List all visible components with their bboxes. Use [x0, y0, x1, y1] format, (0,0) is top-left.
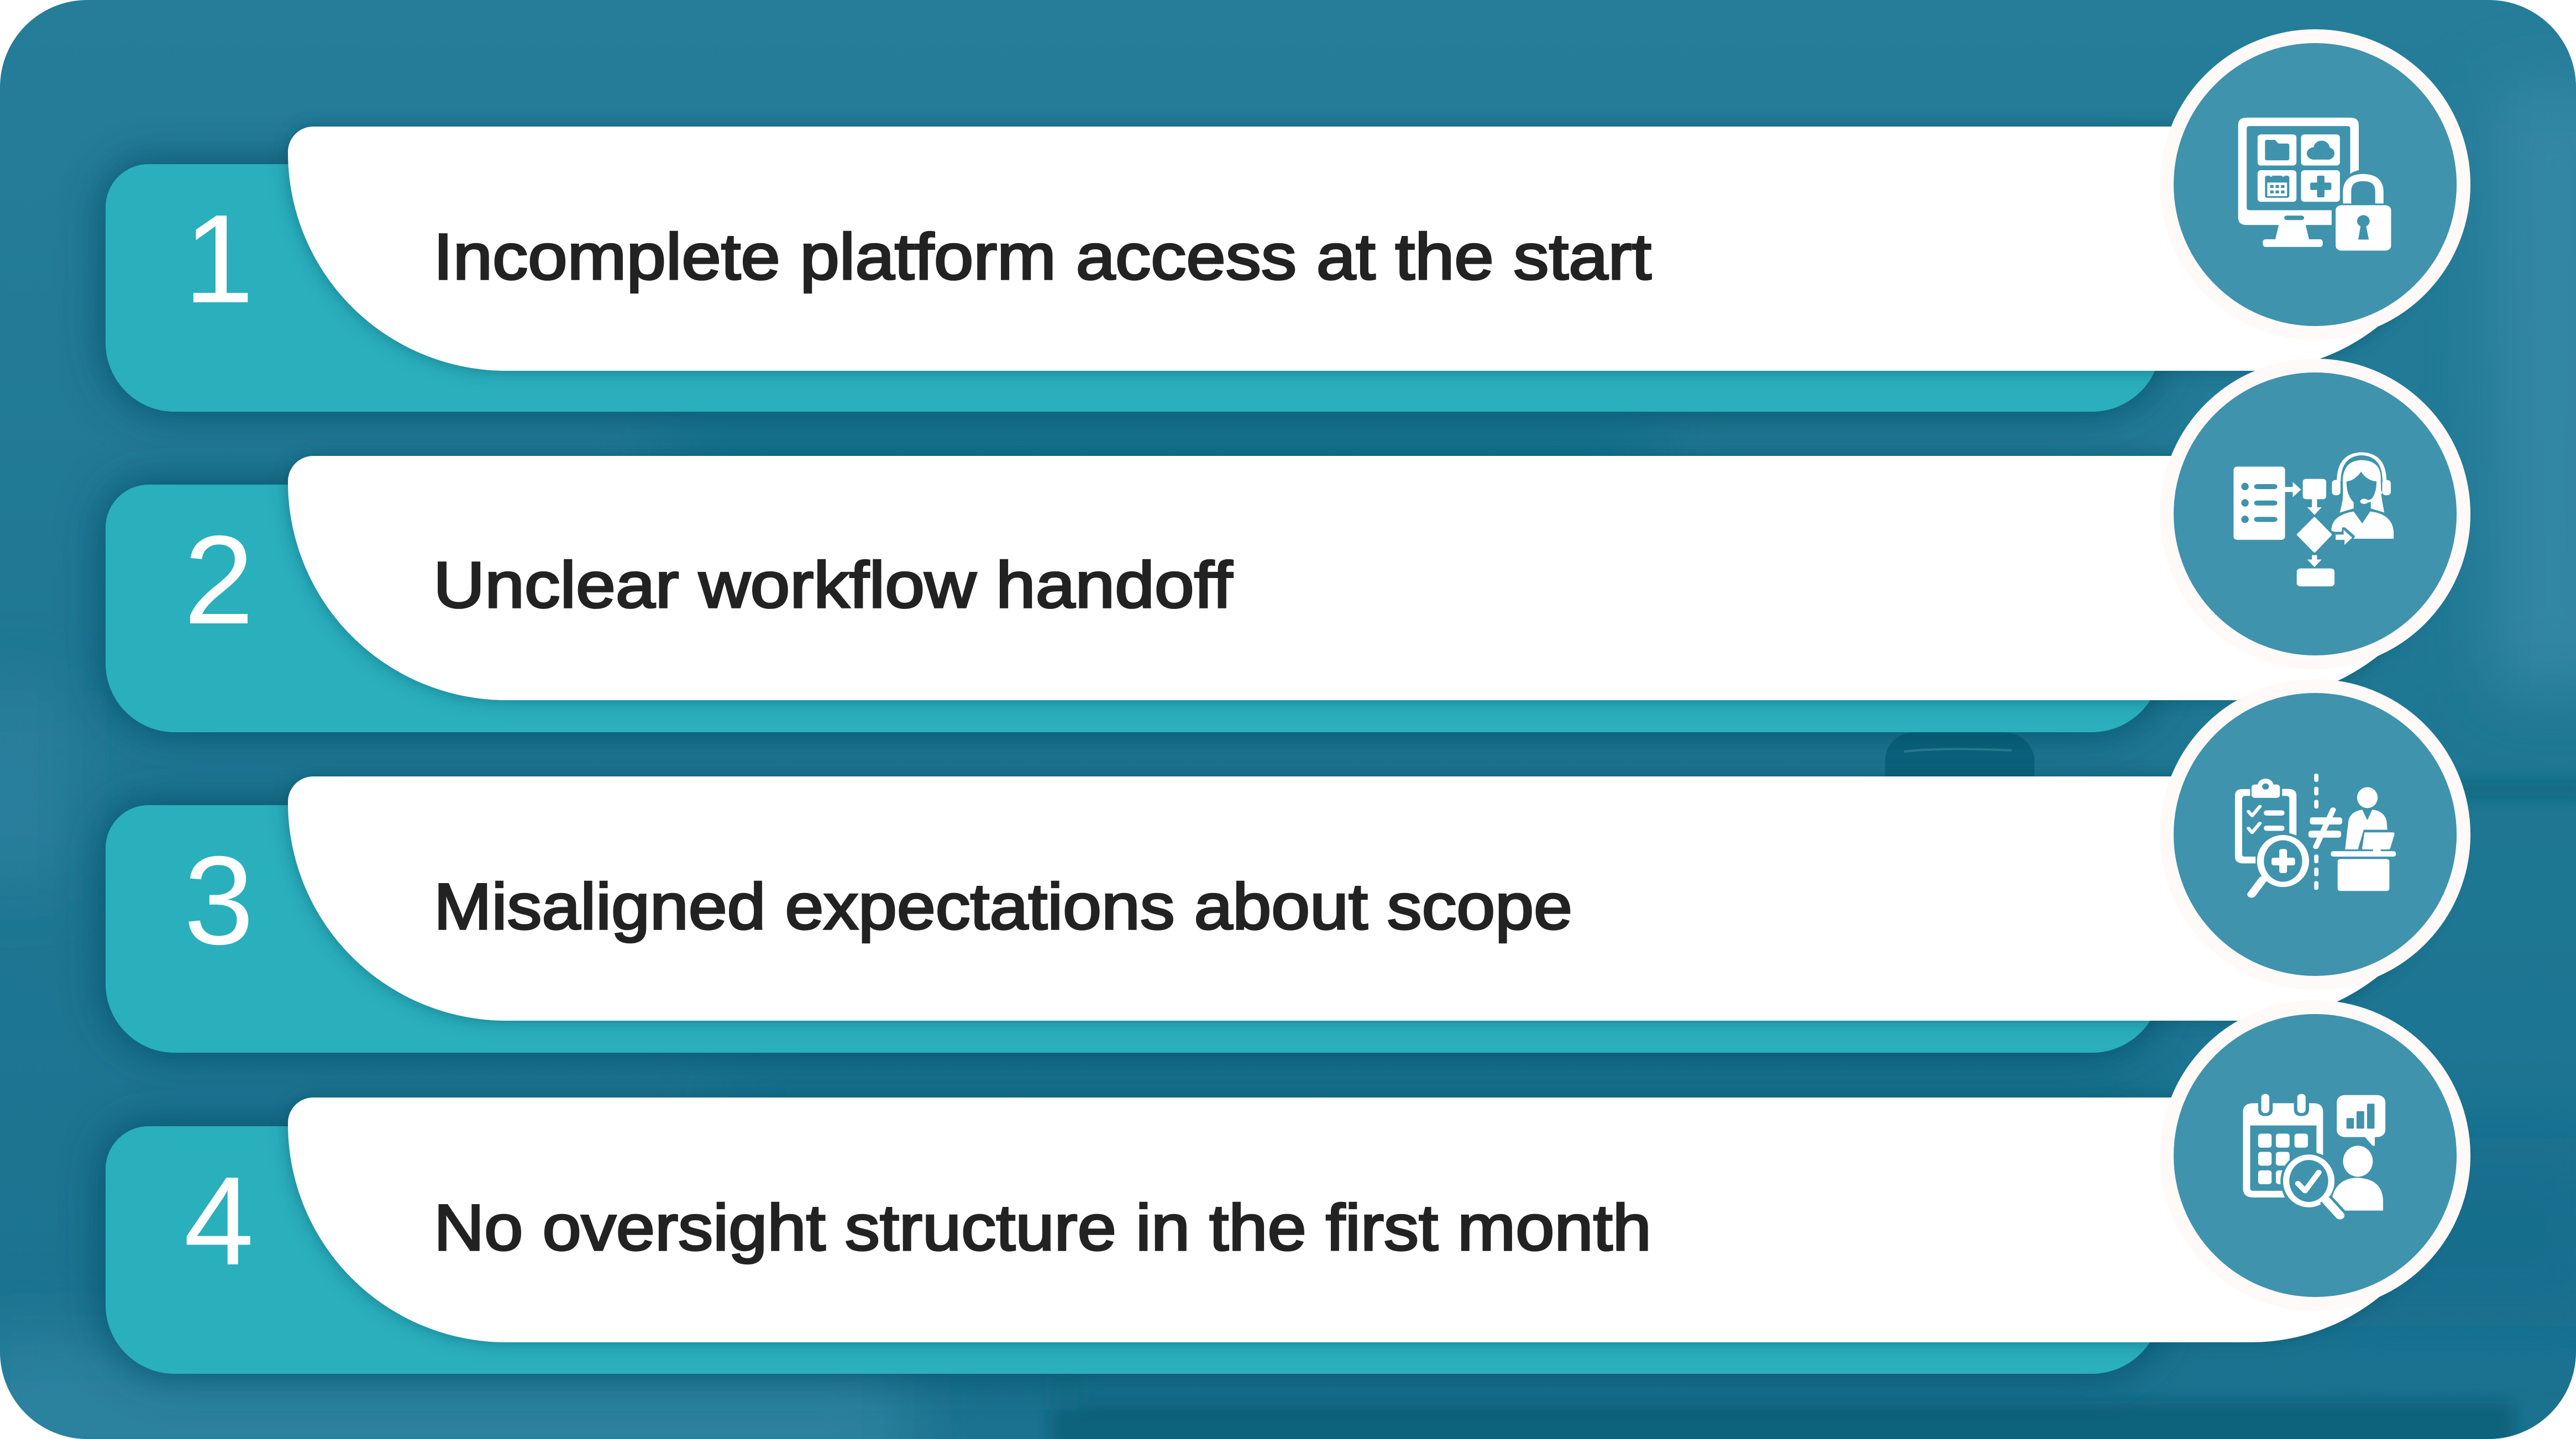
number tab 1: [106, 164, 2161, 412]
text 3: Misaligned expectations about scope: [434, 870, 1572, 943]
white panel 4: [288, 1097, 2456, 1342]
number tab 1: 1: [184, 189, 254, 329]
text 4: No oversight structure in the first month: [434, 1191, 1651, 1264]
text 1: Incomplete platform access at the start: [433, 220, 1651, 293]
number tab 3: [106, 805, 2161, 1053]
number tab 2: [106, 485, 2161, 732]
white panel 3: [288, 776, 2456, 1021]
white panel 1: [288, 127, 2456, 371]
icon: workflow chart and support agent: [2233, 454, 2394, 586]
icon circle 4: [2166, 1007, 2464, 1304]
white panel 2: [288, 456, 2456, 700]
icon: checklist not equal to person at desk: [2235, 774, 2396, 895]
number tab 4: 4: [184, 1151, 254, 1291]
icon circle 1: [2166, 36, 2464, 333]
row 3: misaligned expectations: [106, 686, 2464, 1053]
icon: monitor with apps and padlock: [2238, 118, 2391, 251]
row 2: unclear workflow handoff: [106, 366, 2464, 732]
number tab 2: 2: [184, 510, 254, 650]
text 2: Unclear workflow handoff: [433, 549, 1232, 622]
number tab 4: [106, 1126, 2161, 1374]
row 1: incomplete platform access: [106, 36, 2464, 412]
icon circle 2: [2166, 366, 2464, 662]
icon: calendar review and person with chart bubble: [2243, 1094, 2385, 1216]
row 4: no oversight structure: [106, 1007, 2464, 1374]
icon circle 3: [2166, 686, 2464, 983]
number tab 3: 3: [184, 831, 254, 971]
